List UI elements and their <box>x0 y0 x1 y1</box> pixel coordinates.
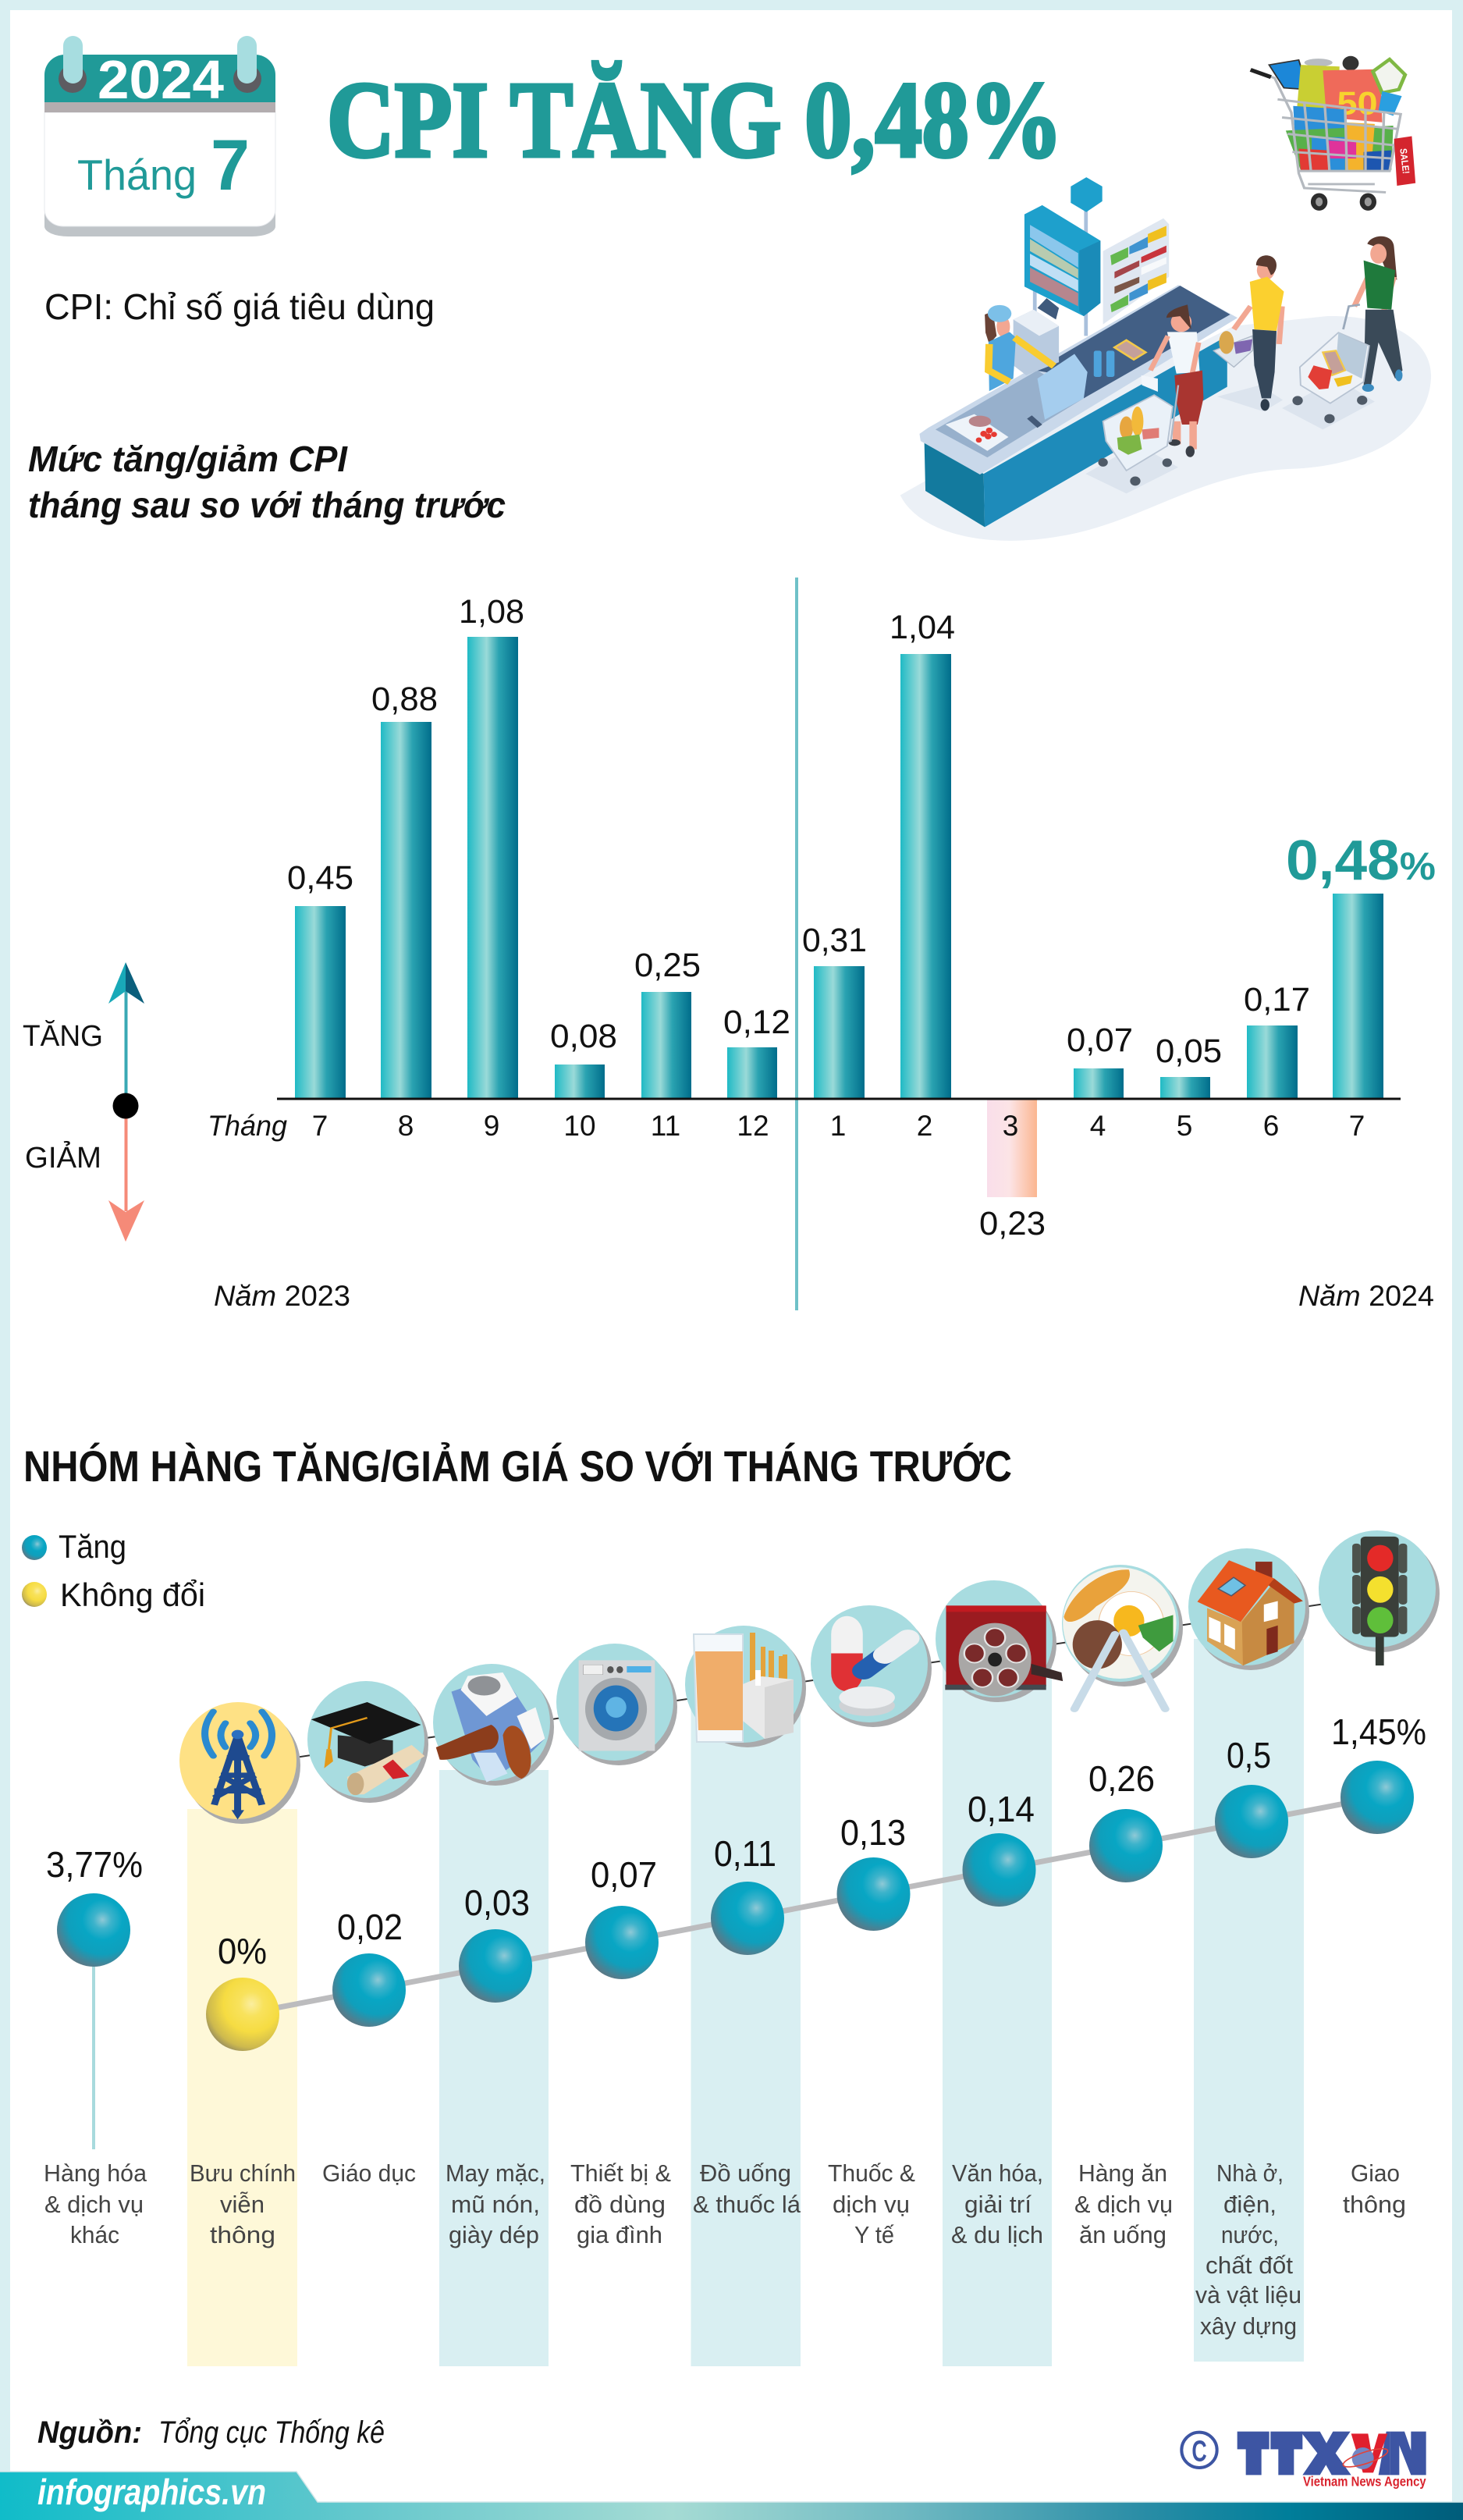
icon: drink and cigarettes <box>694 1633 794 1742</box>
icon: clothes and shoes <box>436 1672 545 1782</box>
customer at counter <box>1171 312 1191 332</box>
rack <box>1103 219 1169 325</box>
rate balls <box>57 1761 1414 2051</box>
category captions: & dịch vụ <box>1074 2191 1173 2218</box>
rate values: 0,13 <box>840 1812 906 1853</box>
value labels: 0,12 <box>723 1004 790 1041</box>
category captions: Đồ uống <box>700 2159 791 2187</box>
month axis: 3 <box>1003 1110 1018 1142</box>
category captions: khác <box>70 2221 119 2248</box>
logo: TTXVN: C <box>1191 2434 1207 2468</box>
rate connector line <box>243 1797 1377 2014</box>
value labels: 0,17 <box>1244 981 1310 1018</box>
value labels: 1,08 <box>459 593 524 631</box>
rate values: 0,03 <box>464 1882 530 1923</box>
category captions: xây dựng <box>1200 2312 1297 2340</box>
legend <box>22 1528 205 1613</box>
category captions: mũ nón, <box>451 2191 540 2218</box>
terminal <box>1014 310 1059 375</box>
category captions <box>44 2159 1406 2340</box>
direction arrows: tăng / giảm: TĂNG <box>23 1019 103 1053</box>
chart heading <box>28 439 506 525</box>
value labels: 0,88 <box>371 681 438 718</box>
month axis: 8 <box>398 1110 414 1142</box>
title: CPI TĂNG 0,48% <box>327 60 1063 180</box>
category captions: Y tế <box>854 2221 894 2248</box>
value labels: 0,05 <box>1156 1033 1222 1070</box>
woman with cart <box>1367 236 1397 280</box>
category captions: Hàng ăn <box>1078 2159 1167 2187</box>
category captions: ăn uống <box>1079 2221 1166 2248</box>
category captions: Hàng hóa <box>44 2159 147 2187</box>
calendar badge <box>44 36 275 236</box>
category captions: và vật liệu <box>1195 2281 1301 2309</box>
icons left group <box>205 1660 655 1819</box>
category captions: May mặc, <box>446 2159 545 2187</box>
display <box>1084 209 1088 239</box>
category captions: Bưu chính <box>190 2159 296 2187</box>
category captions: điện, <box>1223 2191 1277 2218</box>
category captions: đồ dùng <box>574 2191 666 2218</box>
value labels <box>287 593 1436 1242</box>
year labels <box>214 1280 1434 1312</box>
month axis: 10 <box>563 1110 596 1142</box>
category captions: Giáo dục <box>322 2159 416 2187</box>
rate values: 0,5 <box>1227 1735 1271 1775</box>
cashier <box>985 311 996 344</box>
illustration: shopping cart: 50 <box>1337 84 1378 122</box>
month axis: 12 <box>737 1110 769 1142</box>
icon: graduation cap <box>311 1702 424 1795</box>
category captions: thông <box>210 2221 275 2248</box>
value labels: 1,04 <box>890 609 955 646</box>
category captions: viễn <box>220 2191 265 2218</box>
category captions: nước, <box>1221 2221 1279 2248</box>
value labels: 0,25 <box>634 947 701 984</box>
man <box>1257 261 1275 280</box>
month axis: 9 <box>484 1110 499 1142</box>
counter <box>925 443 985 527</box>
category captions: giày dép <box>449 2221 539 2248</box>
category captions: Giao <box>1351 2159 1400 2187</box>
source <box>37 2415 385 2450</box>
logo: TTXVN: Vietnam News Agency <box>1303 2473 1426 2489</box>
category captions: Thuốc & <box>828 2159 915 2187</box>
icon connector line <box>238 1596 1377 1766</box>
illustration: shopping cart: SALE! <box>1397 148 1412 174</box>
category captions: gia đình <box>577 2221 662 2248</box>
calendar badge: 2024 <box>98 49 224 110</box>
value labels: 0,07 <box>1067 1022 1133 1059</box>
legend: Tăng <box>59 1528 126 1565</box>
calendar badge: 7 <box>211 126 250 205</box>
month axis: 11 <box>651 1110 680 1142</box>
value labels: 0,48% <box>1286 830 1436 892</box>
month axis: 6 <box>1263 1110 1279 1142</box>
basket end <box>1213 336 1252 367</box>
icon: traffic light <box>1352 1537 1407 1665</box>
icon: washing machine <box>579 1660 655 1750</box>
highlight bands <box>187 1639 1304 2366</box>
rate values: 3,77% <box>46 1844 143 1885</box>
rate values: 0,14 <box>968 1789 1035 1829</box>
stem for other goods <box>92 1930 95 2149</box>
bars <box>295 637 1383 1099</box>
month axis: 7 <box>1349 1110 1365 1142</box>
source: Tổng cục Thống kê <box>158 2415 385 2450</box>
year labels: Năm 2023 <box>214 1280 350 1312</box>
rate values: 0,11 <box>714 1833 776 1874</box>
illustration: shopping cart <box>1251 56 1415 208</box>
logo: TTXVN <box>1181 2432 1426 2489</box>
category captions: giải trí <box>964 2191 1032 2218</box>
icon: film reel <box>945 1605 1063 1696</box>
CPI definition: CPI: Chỉ số giá tiêu dùng <box>44 286 435 327</box>
footer band <box>0 2472 1463 2520</box>
source: Nguồn: <box>37 2415 142 2450</box>
category captions: Thiết bị & <box>570 2159 671 2187</box>
month axis: Tháng <box>208 1110 287 1142</box>
category captions: & thuốc lá <box>693 2191 801 2218</box>
value labels: 0,31 <box>802 922 867 959</box>
rate values <box>46 1711 1426 1971</box>
chart heading: tháng sau so với tháng trước <box>28 485 506 525</box>
icon: food plate <box>1063 1567 1177 1709</box>
category captions: dịch vụ <box>833 2191 910 2218</box>
value labels: 0,45 <box>287 859 353 897</box>
category captions: thông <box>1343 2191 1406 2218</box>
rate values: 0,07 <box>591 1854 657 1895</box>
category captions: chất đốt <box>1206 2252 1293 2279</box>
value labels: 0,23 <box>979 1205 1046 1242</box>
rate values: 0,26 <box>1088 1758 1155 1799</box>
value labels: 0,08 <box>550 1018 617 1055</box>
rate values: 0,02 <box>337 1907 403 1947</box>
direction arrows: tăng / giảm <box>23 962 144 1242</box>
calendar badge: Tháng <box>77 151 197 199</box>
bar chart: monthly CPI change <box>208 578 1436 1312</box>
footer band: infographics.vn <box>37 2472 266 2512</box>
icon: pills <box>831 1616 908 1716</box>
section heading: NHÓM HÀNG TĂNG/GIẢM GIÁ SO VỚI THÁNG TRƯỚC <box>23 1441 1012 1491</box>
category captions: Nhà ở, <box>1216 2159 1284 2187</box>
category captions: & dịch vụ <box>44 2191 144 2218</box>
month axis: 4 <box>1090 1110 1106 1142</box>
month axis: 7 <box>312 1110 328 1142</box>
month axis: 5 <box>1177 1110 1192 1142</box>
legend: Không đổi <box>60 1576 205 1613</box>
icons right group <box>831 1537 1407 1716</box>
icon: telecom tower <box>205 1711 272 1819</box>
icon circles <box>179 1530 1440 1824</box>
chart heading: Mức tăng/giảm CPI <box>28 439 348 479</box>
category captions: & du lịch <box>951 2221 1043 2248</box>
category captions: Văn hóa, <box>952 2159 1043 2187</box>
rate values: 1,45% <box>1331 1711 1426 1752</box>
illustration: supermarket checkout <box>900 177 1431 541</box>
year divider <box>795 578 798 1310</box>
month axis: 2 <box>917 1110 932 1142</box>
month axis: 1 <box>830 1110 846 1142</box>
rate values: 0% <box>218 1931 267 1971</box>
month axis <box>208 1110 1365 1142</box>
icon: house <box>1198 1560 1303 1665</box>
year labels: Năm 2024 <box>1298 1280 1434 1312</box>
direction arrows: tăng / giảm: GIẢM <box>25 1140 101 1175</box>
